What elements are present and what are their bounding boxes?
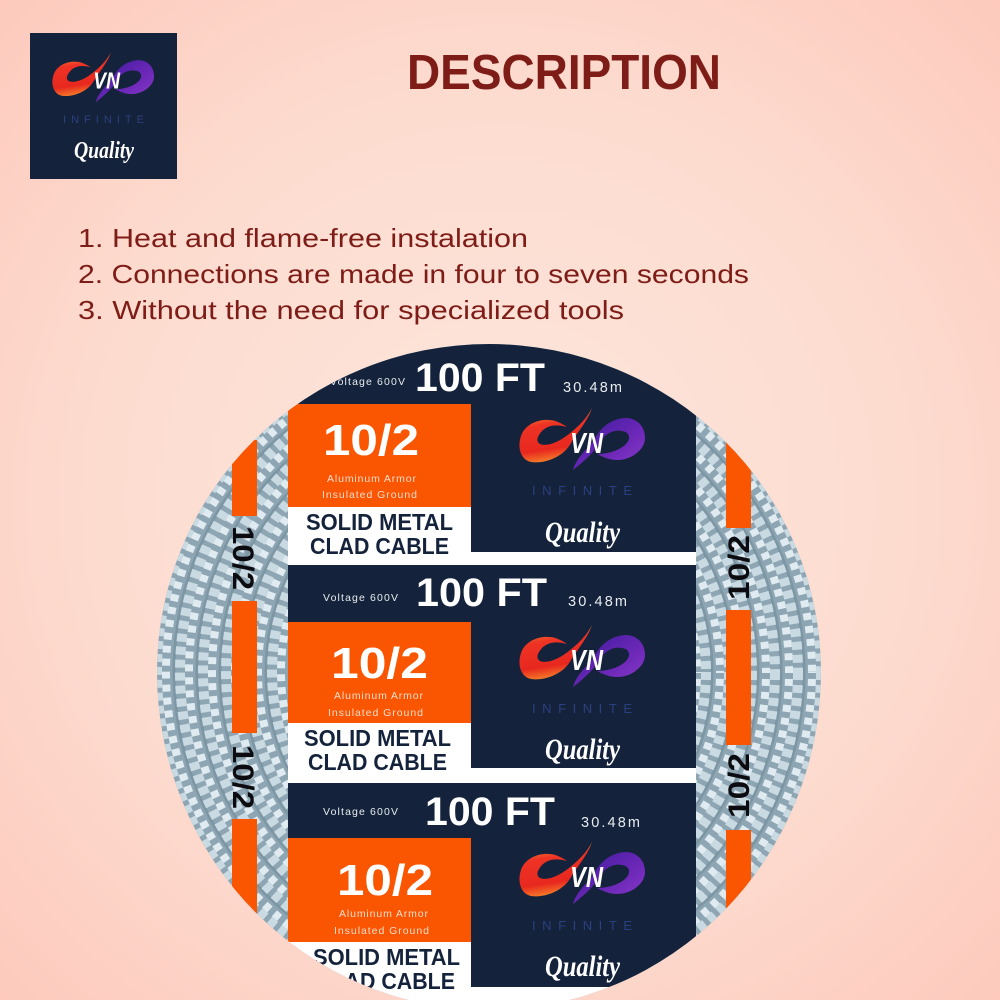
left cable marking strip bbox=[232, 440, 257, 914]
length: 100 FT bbox=[415, 356, 545, 400]
right cable marking strip bbox=[726, 442, 751, 908]
product photo: coiled cable with labels bbox=[150, 340, 830, 1000]
armor line: Aluminum Armor bbox=[327, 473, 416, 485]
title: DESCRIPTION bbox=[407, 46, 721, 100]
icon: infinity logo: VN bbox=[570, 428, 604, 460]
ground line: Insulated Ground bbox=[334, 925, 429, 937]
voltage: Voltage 600V bbox=[323, 806, 398, 818]
ground line: Insulated Ground bbox=[328, 707, 423, 719]
brand script: Quality bbox=[74, 138, 134, 164]
length: 100 FT bbox=[425, 790, 555, 834]
label 1 bbox=[288, 340, 696, 559]
right cable marking strip: 10/2 bbox=[723, 535, 756, 600]
voltage: Voltage 600V bbox=[330, 376, 405, 388]
cable type line 2: CLAD CABLE bbox=[316, 968, 455, 994]
cable type: SOLID METAL bbox=[306, 509, 453, 535]
feature list: 3. Without the need for specialized tools bbox=[78, 295, 624, 325]
ground line: Insulated Ground bbox=[322, 489, 417, 501]
icon: infinity logo bbox=[52, 52, 154, 102]
icon: infinity logo: VN bbox=[93, 67, 121, 93]
cable type: SOLID METAL bbox=[313, 944, 460, 970]
cable type line 2: CLAD CABLE bbox=[310, 533, 449, 559]
armor line: Aluminum Armor bbox=[334, 690, 424, 702]
brand name: INFINITE bbox=[63, 114, 144, 126]
feature list: 1. Heat and flame-free instalation bbox=[78, 223, 528, 253]
label 2 bbox=[288, 565, 696, 775]
voltage: Voltage 600V bbox=[323, 592, 398, 604]
icon: infinity logo: VN bbox=[570, 645, 604, 677]
brand name: INFINITE bbox=[532, 918, 632, 933]
cable type line 2: CLAD CABLE bbox=[308, 749, 447, 775]
icon: infinity logo bbox=[519, 625, 645, 687]
feature list: 2. Connections are made in four to seven seconds bbox=[78, 259, 749, 289]
icon: infinity logo: VN bbox=[570, 862, 604, 894]
gauge: 10/2 bbox=[331, 639, 428, 688]
label backing bbox=[288, 340, 696, 1000]
gauge: 10/2 bbox=[323, 416, 419, 465]
right cable marking strip: 10/2 bbox=[723, 753, 756, 818]
left cable marking strip: 10/2 bbox=[226, 745, 259, 809]
logo badge bbox=[30, 33, 177, 179]
icon: infinity logo bbox=[519, 842, 645, 904]
armor line: Aluminum Armor bbox=[339, 908, 428, 920]
label 3 bbox=[288, 783, 696, 994]
brand name: INFINITE bbox=[532, 483, 632, 498]
brand script: Quality bbox=[545, 516, 621, 549]
left cable marking strip: 10/2 bbox=[226, 526, 259, 590]
metric length: 30.48m bbox=[568, 594, 627, 610]
brand name: INFINITE bbox=[532, 701, 632, 716]
icon: infinity logo bbox=[519, 408, 645, 470]
coiled armored cable bbox=[150, 340, 830, 1000]
brand script: Quality bbox=[545, 733, 621, 766]
feature list bbox=[78, 223, 749, 325]
length: 100 FT bbox=[416, 571, 547, 615]
gauge: 10/2 bbox=[337, 856, 433, 905]
brand script: Quality bbox=[545, 950, 621, 983]
cable type: SOLID METAL bbox=[304, 725, 451, 751]
metric length: 30.48m bbox=[581, 815, 640, 831]
metric length: 30.48m bbox=[563, 380, 622, 396]
